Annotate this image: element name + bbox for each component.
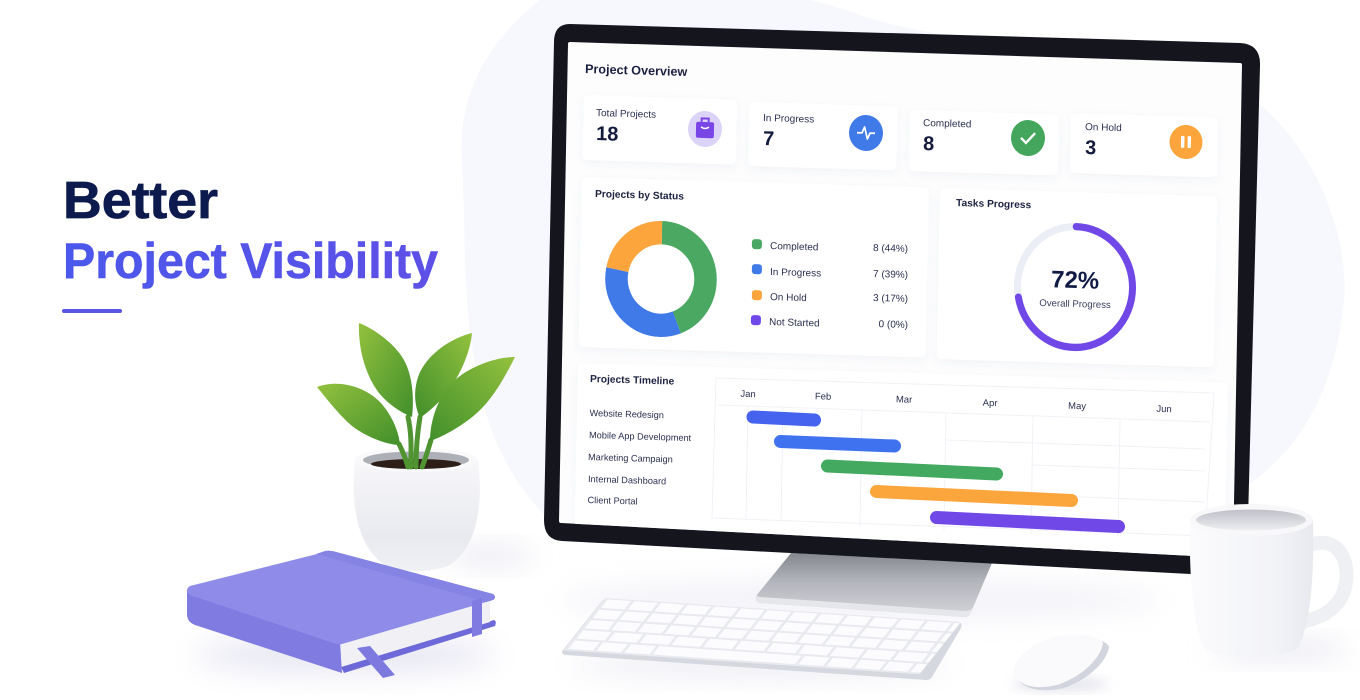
card: total projects [596,109,722,147]
notebook [187,551,496,678]
legend [751,239,908,331]
mouse [1014,635,1109,690]
project names: Website Redesign [589,408,664,420]
legend: 3 (17%) [873,293,908,305]
plant [317,323,515,571]
keyboard [562,598,962,680]
panel: tasks progress: 72% [1051,266,1099,295]
panel: projects by status [596,190,908,337]
card: total projects: Total Projects [596,108,656,121]
card: in progress: In Progress [763,113,814,126]
donut chart [605,221,717,337]
heading: Project Visibility: Project Visibility [63,233,438,289]
dashboard title: Project Overview [585,62,688,79]
project names: Mobile App Development [589,430,692,443]
card: in progress: 7 [763,128,774,150]
card: total projects: 18 [596,123,619,146]
legend: Completed [770,241,819,253]
pot [354,448,480,571]
stems [399,417,431,467]
card: on hold: On Hold [1085,122,1122,134]
cover band [316,551,495,602]
title [62,172,438,313]
legend: 8 (44%) [873,243,908,255]
card: on hold: 3 [1085,137,1096,159]
background blob [462,0,1344,530]
title underline [62,309,122,313]
mug body [1190,520,1313,656]
project names: Client Portal [587,495,638,507]
panel: tasks progress: Overall Progress [1039,298,1111,311]
month labels: May [1068,401,1086,412]
legend: On Hold [770,292,807,304]
mug handle [1300,543,1346,622]
legend: 0 (0%) [878,319,908,331]
elastic [472,598,482,637]
spine [187,589,342,673]
card: on hold [1086,123,1202,159]
panel: tasks progress: Tasks Progress [956,198,1032,211]
gantt bars [753,417,1118,526]
icon: pulse [849,114,883,152]
month labels: Jun [1156,404,1172,415]
lower cover [341,620,496,673]
panel: projects by status: Projects by Status [595,189,684,203]
card: completed: Completed [923,118,972,130]
legend: Not Started [769,317,820,330]
month labels: Feb [815,391,831,403]
project names [587,408,692,507]
monitor bezel [544,24,1260,576]
gantt grid [712,378,1214,537]
icon: pause [1169,125,1203,159]
project names: Marketing Campaign [588,452,673,465]
month labels [740,390,1172,412]
leaves [317,323,515,445]
dashboard [574,62,1228,573]
panel: projects timeline [574,375,1214,556]
monitor stand [756,553,992,617]
panel: projects timeline: Projects Timeline [590,374,675,388]
legend: 7 (39%) [873,269,908,281]
mug opening [1196,510,1306,530]
cover [187,551,495,644]
project names: Internal Dashboard [588,474,666,486]
icon: briefcase [688,110,722,148]
icon: check [1011,119,1045,157]
month labels: Apr [983,398,998,409]
progress ring [1016,225,1134,349]
heading: Better: Better [63,172,218,230]
month labels: Mar [896,394,912,406]
monitor screen [559,42,1242,558]
card: in progress [764,114,883,151]
panel: tasks progress [956,199,1136,352]
card: completed [924,119,1045,156]
pages [341,598,490,667]
legend: In Progress [770,267,821,280]
coffee mug [1190,504,1346,656]
ribbon bookmark [357,646,395,678]
desk shadows [195,546,1350,690]
card: completed: 8 [923,133,934,155]
month labels: Jan [740,389,756,400]
